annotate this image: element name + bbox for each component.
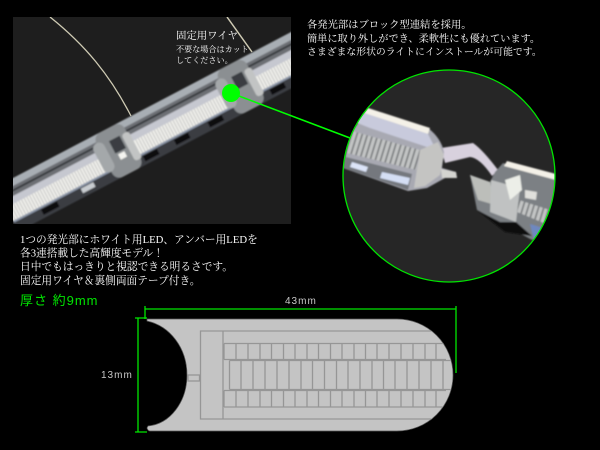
label: 43mm: 43mm: [285, 296, 317, 307]
top right text: 各発光部はブロック型連結を採用。: [307, 18, 472, 31]
right LED module: [470, 163, 556, 240]
feature description: 1つの発光部にホワイト用LED、アンバー用LEDを: [20, 233, 258, 246]
left LED module: [344, 122, 456, 192]
callout dot: [222, 84, 240, 102]
panel: strip photo: [13, 17, 291, 224]
module body: [147, 319, 453, 431]
feature description: 固定用ワイヤ＆裏側両面テープ付き。: [20, 274, 200, 287]
top right text: さまざまな形状のライトにインストールが可能です。: [307, 45, 542, 58]
top right text: [307, 18, 542, 58]
feature description: 各3連搭載した高輝度モデル！: [20, 246, 164, 260]
ribbon cable: [441, 143, 498, 176]
feature description: [20, 233, 258, 287]
top row of cells: [224, 344, 446, 360]
middle row of cells: [230, 360, 454, 390]
wire left: [50, 17, 131, 116]
connector tab: [188, 375, 200, 381]
LED strip: [13, 31, 291, 224]
thickness label: 厚さ 約9mm: [20, 293, 99, 308]
panel: zoom circle photo: [343, 70, 556, 282]
width dimension: [145, 306, 456, 373]
zoom circle outline: [343, 70, 555, 282]
photo caption: 不要な場合はカット: [176, 44, 249, 54]
dimension diagram: [147, 319, 460, 431]
top right text: 簡単に取り外しができ、柔軟性にも優れています。: [307, 32, 540, 45]
bottom row of cells: [224, 390, 446, 407]
photo caption: 固定用ワイヤ: [176, 29, 238, 42]
label: 13mm: 13mm: [101, 370, 133, 381]
feature description: 日中でもはっきりと視認できる明るさです。: [20, 260, 233, 273]
callout line: [231, 93, 350, 138]
height dimension: [135, 318, 147, 432]
photo caption: [176, 29, 249, 65]
wire right: [227, 17, 252, 52]
joint 1: [95, 124, 142, 178]
joint 2: [217, 60, 265, 114]
inner frame: [200, 331, 460, 419]
photo caption: してください。: [176, 56, 233, 65]
